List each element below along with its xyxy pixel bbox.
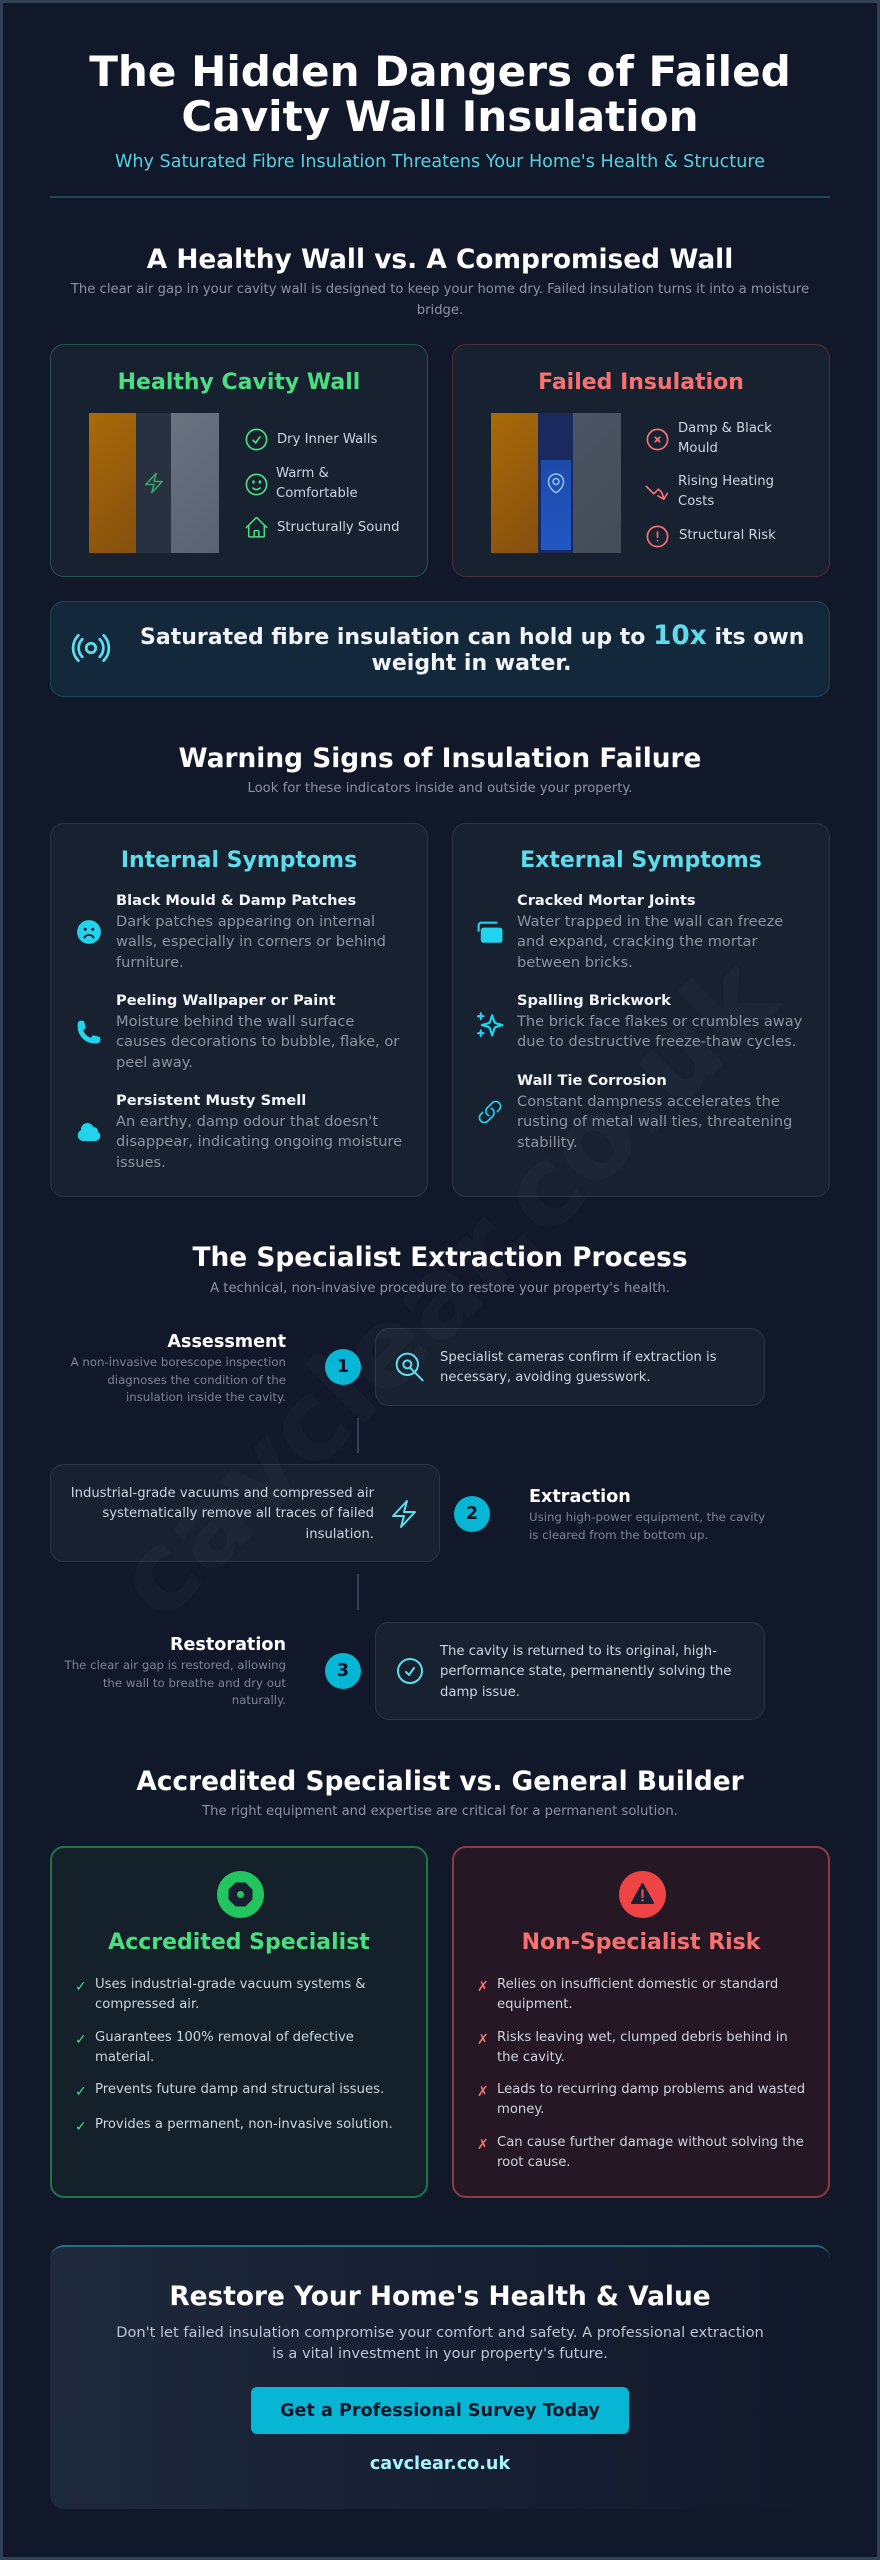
step 3 description (65, 1632, 286, 1710)
text: spalling brickwork: The brick face flakes or crumbles away (517, 1012, 802, 1030)
cross mark: ✗ (477, 2084, 489, 2100)
title: Cavity Wall Insulation (181, 92, 699, 141)
heading: internal symptoms: Internal Symptoms (121, 848, 357, 873)
panel: call to action (50, 2245, 830, 2509)
label: rising heating costs: Rising Heating (678, 474, 774, 489)
icon: exclamation circle (646, 526, 668, 548)
button: survey (251, 2387, 629, 2434)
cross mark: ✗ (477, 2137, 489, 2153)
text: cracked mortar: between bricks. (517, 954, 633, 970)
risk 3: Leads to recurring damp problems and wasted (497, 2082, 805, 2097)
heading: external symptoms: External Symptoms (520, 848, 762, 873)
step 2 number (454, 1496, 490, 1532)
step 2 detail (71, 1484, 374, 1545)
step 1 description: diagnoses the condition of the (107, 1373, 286, 1387)
text: wall tie corrosion: rusting of metal wall ties, threatening (517, 1113, 792, 1130)
section intro: specialist vs builder: The right equipment and expertise are critical for a permanent solution. (202, 1804, 678, 1819)
text: musty smell: Persistent Musty Smell (116, 1092, 306, 1109)
check mark: ✓ (75, 2084, 87, 2100)
risk 3: money. (497, 2102, 545, 2117)
text: musty smell: issues. (116, 1154, 166, 1170)
text: spalling brickwork: due to destructive freeze-thaw cycles. (517, 1033, 796, 1050)
label: dry inner walls: Dry Inner Walls (277, 432, 377, 447)
step 1 description (70, 1332, 286, 1404)
callout text (140, 620, 804, 676)
label: rising heating costs (678, 474, 774, 509)
title (89, 47, 791, 141)
text: cracked mortar (517, 892, 783, 970)
step 2 description (529, 1484, 765, 1544)
title: The Hidden Dangers of Failed (89, 47, 791, 96)
panel: external symptoms (452, 823, 830, 1197)
label: warm and comfortable: Comfortable (276, 486, 358, 501)
heading: extraction process: The Specialist Extraction Process (192, 1242, 688, 1273)
step 3 detail: performance state, permanently solving the (440, 1664, 731, 1679)
step 2 detail: systematically remove all traces of failed (102, 1506, 374, 1521)
step 3 description: The clear air gap is restored, allowing (65, 1658, 286, 1672)
call to action text: is a vital investment in your property's future. (272, 2344, 608, 2362)
text: peeling wallpaper: peel away. (116, 1054, 193, 1070)
text: peeling wallpaper: Moisture behind the wall surface (116, 1012, 354, 1030)
step 3 description: Restoration (170, 1635, 286, 1655)
step 1 detail: necessary, avoiding guesswork. (440, 1370, 651, 1385)
section intro: healthy vs compromised: The clear air gap in your cavity wall is designed to keep your home dry. Failed insulation turns it into a moisture (71, 282, 809, 297)
step 1 card (375, 1328, 765, 1406)
text: cracked mortar: Water trapped in the wall can freeze (517, 912, 783, 930)
step 3 description: the wall to breathe and dry out (103, 1676, 286, 1690)
icon: sparkles (477, 1012, 504, 1037)
symptom: wall tie corrosion (478, 1072, 792, 1150)
section intro: extraction process: A technical, non-invasive procedure to restore your property's health. (210, 1281, 670, 1296)
icon: stacked bricks (478, 922, 502, 943)
cross mark: ✗ (477, 1979, 489, 1995)
label: damp and black mould: Mould (678, 441, 718, 456)
risk 3 (497, 2080, 805, 2121)
symptom: spalling brickwork (477, 992, 802, 1050)
text: wall tie corrosion (517, 1072, 792, 1150)
text: musty smell: An earthy, damp odour that doesn't (116, 1112, 378, 1130)
symptom: peeling wallpaper (78, 992, 400, 1070)
text: black mould: Dark patches appearing on internal (116, 912, 375, 930)
benefit list: healthy (246, 428, 399, 538)
text: peeling wallpaper (116, 992, 400, 1070)
step 1 description: Assessment (167, 1332, 286, 1352)
text: spalling brickwork (516, 992, 802, 1050)
cross mark: ✗ (477, 2032, 489, 2048)
heading: call to action: Restore Your Home's Health & Value (169, 2281, 711, 2312)
symptom: cracked mortar (478, 892, 783, 970)
heading: warning signs: Warning Signs of Insulation Failure (179, 743, 701, 774)
benefit 2 (95, 2028, 354, 2069)
step 3 number (325, 1653, 361, 1689)
call to action text: Don't let failed insulation compromise your comfort and safety. A professional extraction (116, 2324, 764, 2341)
label: damp and black mould (678, 421, 772, 456)
list: non-specialist risks (454, 1974, 828, 2164)
step 2 detail: insulation. (306, 1527, 374, 1542)
check mark: ✓ (75, 2119, 87, 2135)
icon: cloud (78, 1123, 100, 1141)
step 3: restoration (50, 1622, 766, 1720)
benefit 1: compressed air. (95, 1997, 199, 2012)
section intro: healthy vs compromised: bridge. (417, 302, 463, 318)
step 1 detail: Specialist cameras confirm if extraction is (440, 1350, 717, 1365)
text: cracked mortar: and expand, cracking the mortar (517, 933, 758, 950)
step 2 description: is cleared from the bottom up. (529, 1528, 708, 1542)
website link: cavclear.co.uk (370, 2454, 510, 2474)
benefit 2: Guarantees 100% removal of defective (95, 2030, 354, 2045)
icon: signal (72, 634, 110, 662)
benefit 2: material. (95, 2050, 154, 2065)
text: cracked mortar: Cracked Mortar Joints (517, 892, 696, 909)
label: structurally sound: Structurally Sound (277, 520, 399, 535)
list: specialist benefits (52, 1974, 426, 2144)
text: black mould: walls, especially in corners or behind (116, 933, 386, 950)
call to action text (50, 2323, 830, 2364)
step 1 number (325, 1349, 361, 1385)
text: spalling brickwork: Spalling Brickwork (517, 992, 671, 1009)
heading: healthy vs compromised: A Healthy Wall vs. A Compromised Wall (147, 244, 733, 275)
section intro: healthy vs compromised (70, 282, 809, 318)
step 3 detail (440, 1642, 731, 1703)
step 3 number: 3 (337, 1661, 349, 1681)
text: musty smell: disappear, indicating ongoing moisture (116, 1133, 402, 1150)
step 2 number: 2 (466, 1504, 478, 1524)
benefit 3: Prevents future damp and structural issues. (95, 2082, 384, 2097)
icon: house (246, 516, 268, 538)
icon: check circle (246, 428, 268, 450)
risk 1: Relies on insufficient domestic or standard (497, 1977, 778, 1992)
step 3 detail: The cavity is returned to its original, high- (440, 1644, 717, 1659)
text: wall tie corrosion: Constant dampness accelerates the (517, 1092, 780, 1110)
risk 1 (497, 1975, 778, 2016)
step 1 detail (440, 1350, 717, 1385)
icon: lightning bolt (388, 1498, 420, 1530)
panel: healthy cavity wall (50, 344, 428, 577)
step 2 detail: Industrial-grade vacuums and compressed air (71, 1486, 374, 1501)
heading: specialist vs builder: Accredited Specialist vs. General Builder (136, 1766, 744, 1797)
step 1 description: insulation inside the cavity. (126, 1390, 286, 1404)
step 2 description: Extraction (529, 1487, 631, 1507)
heading: failed insulation: Failed Insulation (538, 370, 744, 395)
heading: healthy cavity wall: Healthy Cavity Wall (118, 370, 360, 395)
panel: internal symptoms (50, 823, 428, 1197)
step 2: extraction (50, 1464, 765, 1562)
label: warm and comfortable (276, 466, 358, 501)
icon: x circle (646, 428, 668, 450)
icon: chain link (478, 1100, 502, 1124)
panel: non-specialist risk (452, 1846, 830, 2198)
icon: frowning face (77, 920, 101, 944)
badge: warning (619, 1871, 666, 1918)
step 2 card (50, 1464, 440, 1562)
step 1 number: 1 (337, 1357, 349, 1377)
step 3 description: naturally. (232, 1693, 286, 1707)
panel: accredited specialist (50, 1846, 428, 2198)
step 3 card (375, 1622, 765, 1720)
heading: non-specialist risk: Non-Specialist Risk (522, 1930, 760, 1955)
risk 1: equipment. (497, 1997, 573, 2012)
text: wall tie corrosion: stability. (517, 1134, 578, 1150)
icon: phone (78, 1020, 100, 1044)
label: rising heating costs: Costs (678, 494, 714, 509)
text: peeling wallpaper: Peeling Wallpaper or Paint (116, 992, 336, 1009)
risk 4: Can cause further damage without solving the (497, 2135, 804, 2150)
text: black mould (116, 892, 386, 970)
text: black mould: furniture. (116, 954, 184, 970)
wall diagram: healthy (89, 413, 219, 553)
button: survey: Get a Professional Survey Today (280, 2401, 600, 2421)
risk list: failed (646, 421, 776, 548)
symptom: musty smell (78, 1092, 402, 1170)
watermark: cavclear.co.uk (90, 933, 800, 1643)
risk 4 (497, 2133, 804, 2174)
icon: trending down (646, 486, 668, 500)
label: damp and black mould: Damp & Black (678, 421, 772, 436)
text: black mould: Black Mould & Damp Patches (116, 892, 356, 909)
text: wall tie corrosion: Wall Tie Corrosion (517, 1072, 667, 1089)
subtitle: Why Saturated Fibre Insulation Threatens Your Home's Health & Structure (115, 152, 765, 172)
risk 2: the cavity. (497, 2050, 565, 2065)
symptom: black mould (77, 892, 386, 970)
benefit 1: Uses industrial-grade vacuum systems & (95, 1977, 366, 1992)
benefit 4: Provides a permanent, non-invasive solution. (95, 2117, 393, 2132)
check mark: ✓ (75, 2032, 87, 2048)
callout text: weight in water. (372, 651, 571, 676)
step 1 description: A non-invasive borescope inspection (71, 1355, 286, 1369)
text: peeling wallpaper: causes decorations to bubble, flake, or (116, 1033, 399, 1050)
step 3 detail: damp issue. (440, 1685, 520, 1700)
callout: saturation statistic (50, 601, 830, 697)
icon: magnifier (396, 1352, 424, 1382)
step 2 description: Using high-power equipment, the cavity (529, 1510, 765, 1524)
check mark: ✓ (75, 1979, 87, 1995)
panel: failed insulation (452, 344, 830, 577)
risk 4: root cause. (497, 2155, 570, 2170)
risk 2 (497, 2028, 788, 2069)
step 1: assessment (70, 1328, 765, 1406)
callout text: Saturated fibre insulation can hold up to 10x its own (140, 620, 804, 651)
heading: accredited specialist: Accredited Specialist (108, 1930, 370, 1955)
text: musty smell (116, 1092, 402, 1170)
label: structural risk: Structural Risk (679, 528, 776, 543)
risk 2: Risks leaving wet, clumped debris behind in (497, 2030, 788, 2045)
icon: smile (246, 474, 268, 496)
icon: check circle (394, 1655, 426, 1687)
section intro: warning signs: Look for these indicators inside and outside your property. (248, 781, 632, 796)
badge: green seal (217, 1871, 264, 1918)
wall diagram: failed (491, 413, 621, 553)
label: warm and comfortable: Warm & (276, 466, 329, 481)
benefit 1 (95, 1975, 366, 2016)
